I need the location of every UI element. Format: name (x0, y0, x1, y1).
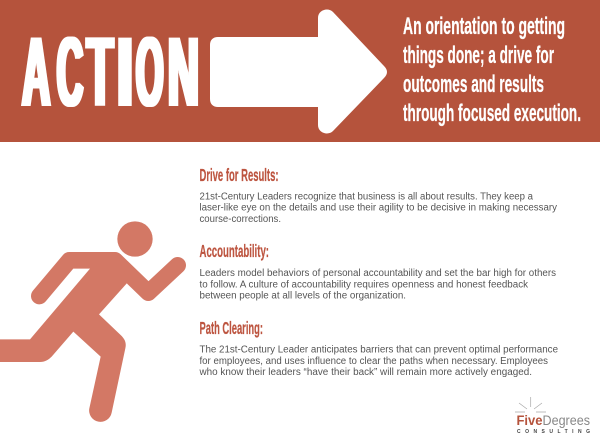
title: ACTION: C (57, 17, 83, 128)
body text: Path Clearing: The 21st-Century Leader anticipates barriers that can prevent optimal performance (200, 345, 559, 356)
logo: Five Degrees Consulting: Degrees (542, 412, 590, 428)
logo: Five Degrees Consulting (515, 397, 590, 434)
body text: Path Clearing: who know their leaders “have their back” will remain more actively engaged. (198, 367, 532, 378)
body text: Drive for Results: 21st-Century Leaders recognize that business is all about results. They keep a (200, 192, 534, 202)
title: ACTION (22, 17, 199, 128)
title: ACTION: T (87, 17, 113, 128)
title: ACTION: I (116, 17, 134, 128)
header band (0, 0, 600, 142)
body text: Accountability: to follow. A culture of accountability requires openness and honest feedback (200, 280, 528, 290)
section: Path Clearing (198, 318, 559, 378)
body text: Accountability: between people at all levels of the organization. (200, 290, 406, 302)
header band: N (168, 17, 199, 128)
body text: Accountability: Leaders model behaviors of personal accountability and set the bar high for others (200, 268, 556, 279)
section: Accountability (200, 241, 556, 302)
title: ACTION: A (22, 17, 50, 128)
body text: Path Clearing (198, 345, 559, 378)
icon: logo rays (515, 397, 546, 412)
heading: Drive for Results: Drive for Results: (200, 165, 278, 185)
body text: Accountability (200, 268, 556, 302)
section: Drive for Results (200, 165, 557, 225)
heading: Path Clearing: Path Clearing: (200, 318, 263, 338)
tagline (403, 13, 581, 127)
icon: running figure (0, 221, 178, 422)
heading: Accountability: Accountability: (200, 241, 269, 261)
logo wordmark: Five (516, 412, 543, 428)
body text: Drive for Results: course-corrections. (200, 214, 281, 225)
body text: Drive for Results: laser-like eye on the details and use their agility to be decisive in making necessary (200, 203, 557, 214)
title: ACTION: O (136, 17, 163, 128)
body text: Drive for Results (200, 192, 557, 225)
icon: right arrow (210, 10, 387, 133)
body text: Path Clearing: for employees, and uses influence to clear the paths when necessary. Employees (200, 356, 548, 367)
